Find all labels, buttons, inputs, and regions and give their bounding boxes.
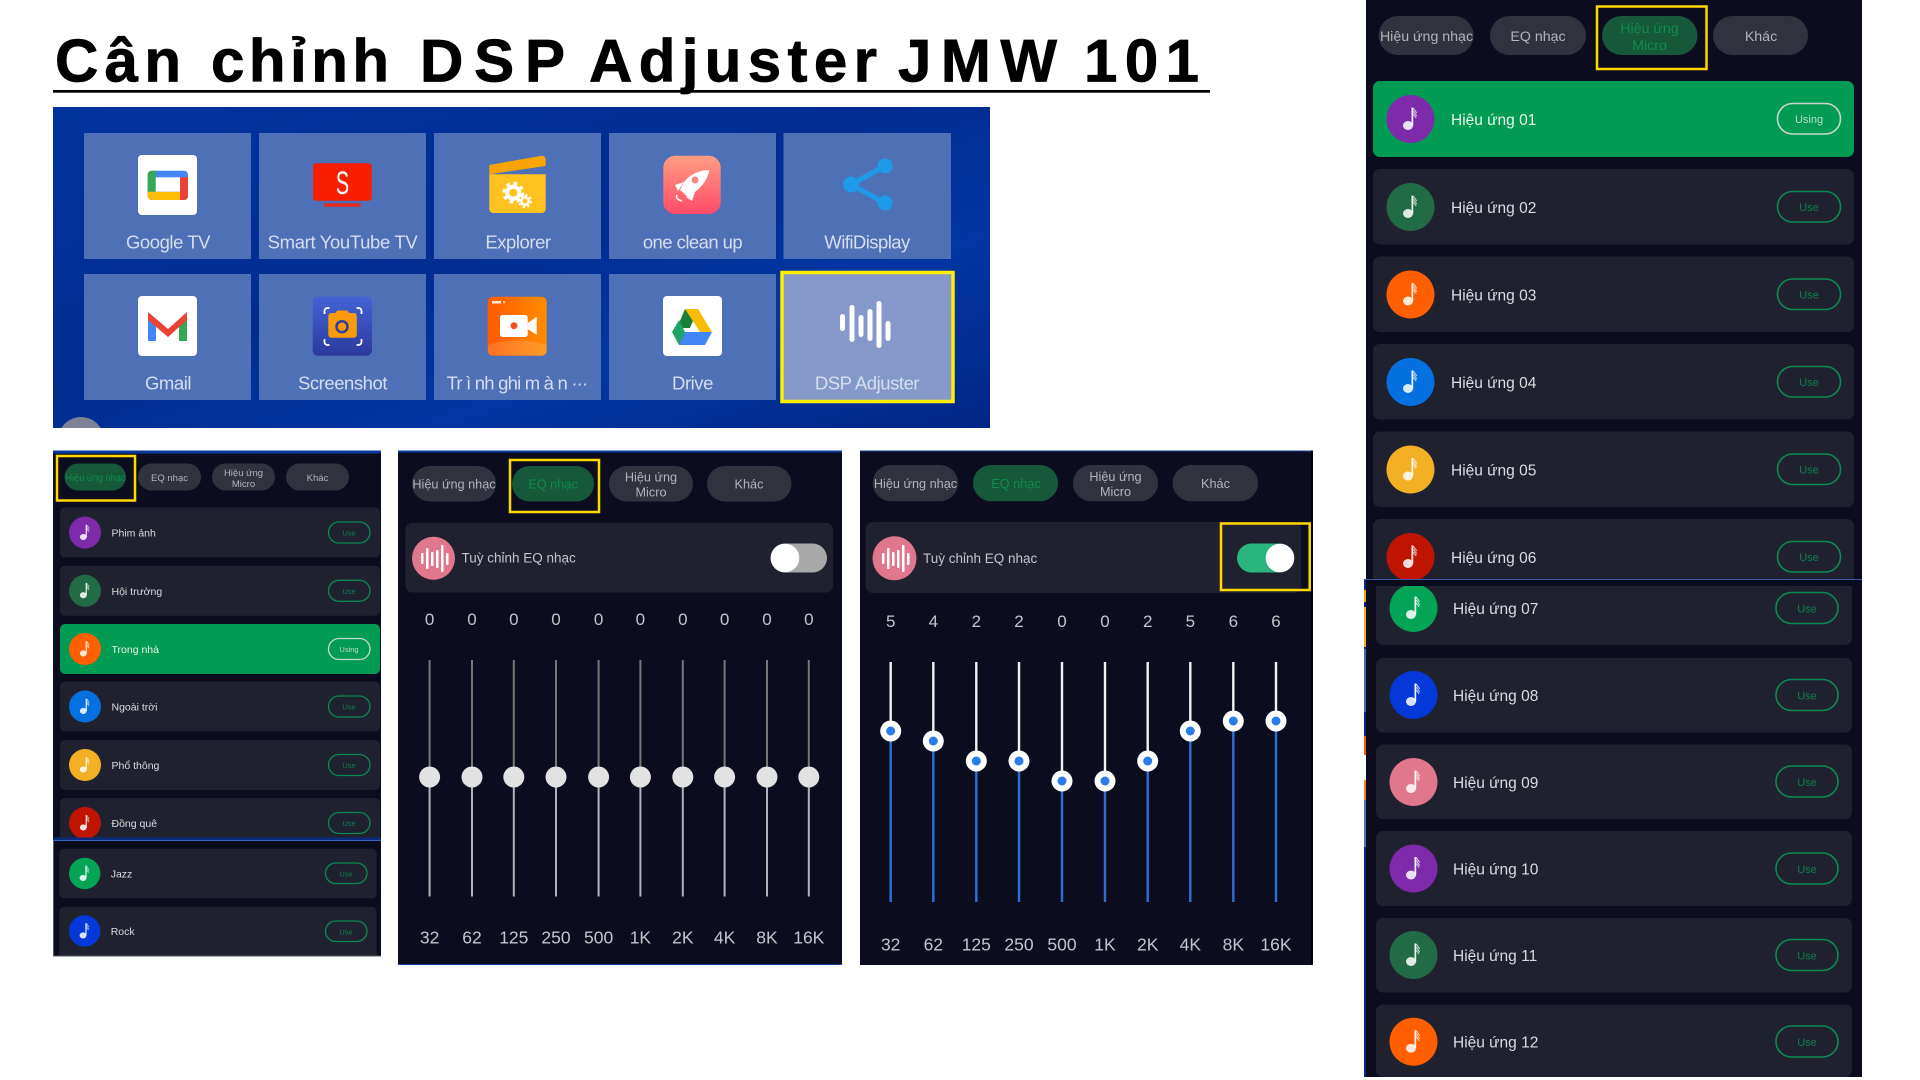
row: Hội trường	[60, 566, 380, 616]
tile: DSP Adjuster highlighted	[782, 273, 952, 401]
tabs: Khác	[735, 478, 764, 492]
tile: screen recorder: Tr ì nh ghi m à n ···	[447, 372, 587, 394]
row: Hiệu ứng 03: Hiệu ứng 03	[1451, 288, 1536, 304]
row: Jazz: Use	[339, 870, 353, 878]
EQ band values: 0	[1057, 612, 1067, 631]
EQ frequency labels: 250	[1004, 934, 1034, 954]
row: Hiệu ứng 01 active: Hiệu ứng 01	[1451, 112, 1536, 129]
row: Rock	[59, 907, 377, 956]
EQ band values: 4	[929, 612, 938, 631]
panel: EQ on	[860, 450, 1313, 965]
EQ sliders	[880, 662, 1286, 902]
EQ band values: 2	[1014, 612, 1024, 631]
EQ band values	[425, 610, 814, 629]
EQ frequency labels: 32	[420, 928, 439, 948]
tile: Gmail: Gmail	[145, 372, 191, 394]
tile: Drive	[609, 274, 776, 400]
tabs	[64, 464, 349, 490]
row: Hiệu ứng 09: Use	[1797, 777, 1817, 789]
row: Hiệu ứng 09	[1376, 744, 1852, 819]
EQ frequency labels: 62	[462, 928, 482, 948]
EQ band values: 0	[1100, 612, 1110, 631]
highlight box: DSP Adjuster	[782, 272, 953, 402]
lower section of micro list	[1364, 579, 1862, 1077]
row: Hiệu ứng 02	[1373, 169, 1854, 244]
tile: Google TV: Google TV	[126, 232, 211, 252]
card: custom EQ toggle off	[406, 523, 833, 592]
EQ band values: 0	[678, 610, 688, 629]
row: Hiệu ứng 02: Use	[1799, 202, 1819, 214]
tabs: Micro	[232, 479, 255, 490]
title: JMW	[898, 28, 1057, 95]
tile: Screenshot: Screenshot	[298, 372, 387, 394]
row: Hiệu ứng 05	[1373, 432, 1854, 507]
row: Hiệu ứng 10: Hiệu ứng 10	[1453, 862, 1539, 878]
EQ band values: 0	[425, 610, 434, 629]
tile: WifiDisplay: WifiDisplay	[824, 232, 911, 252]
tabs: Hiệu ứng	[625, 470, 677, 484]
tabs: Hiệu ứng	[1620, 21, 1679, 37]
row: Hiệu ứng 06	[1373, 519, 1854, 594]
tabs: Micro	[635, 486, 667, 500]
tabs: Khác	[307, 473, 329, 484]
tile: WifiDisplay	[784, 133, 951, 259]
EQ frequency labels: 1K	[630, 928, 651, 948]
row: Hiệu ứng 02: Hiệu ứng 02	[1451, 200, 1536, 217]
panel: micro effects list	[1364, 0, 1862, 1077]
tabs: Hiệu ứng nhạc	[66, 473, 126, 484]
tile: Screenshot	[259, 274, 426, 400]
row: Hiệu ứng 08: Hiệu ứng 08	[1453, 688, 1538, 705]
EQ band values: 0	[636, 610, 645, 629]
tabs: Micro	[1100, 485, 1131, 499]
tabs: Hiệu ứng nhạc	[874, 477, 958, 491]
row: Trong nhà active: Trong nhà	[112, 644, 159, 656]
card: custom EQ toggle on: Tuỳ chỉnh EQ nhạc	[923, 551, 1038, 566]
EQ band values: 6	[1229, 612, 1238, 631]
title: Cân	[55, 28, 181, 95]
row: Hiệu ứng 08: Use	[1797, 690, 1817, 702]
title: 101	[1084, 28, 1199, 95]
EQ frequency labels: 2K	[672, 928, 694, 948]
row: Phim ảnh	[60, 508, 380, 558]
EQ band values: 0	[804, 610, 814, 629]
EQ frequency labels: 16K	[793, 928, 825, 948]
EQ band values: 6	[1271, 612, 1281, 631]
row: Jazz: Jazz	[111, 868, 132, 880]
row: Trong nhà active: Using	[339, 645, 359, 654]
tabs: Hiệu ứng	[224, 468, 263, 479]
title: Adjuster	[589, 28, 877, 95]
row: Hiệu ứng 07: Hiệu ứng 07	[1453, 601, 1538, 618]
EQ frequency labels: 8K	[1223, 934, 1244, 954]
tabs: Hiệu ứng nhạc	[412, 478, 496, 492]
EQ band values	[886, 612, 1281, 631]
EQ band values: 5	[886, 612, 895, 631]
EQ sliders	[419, 660, 819, 896]
EQ frequency labels: 62	[924, 934, 943, 954]
tabs: Hiệu ứng nhạc	[1380, 29, 1473, 45]
tabs: Khác	[1745, 29, 1777, 45]
tile: Drive: Drive	[672, 372, 713, 394]
row: Đồng quê: Use	[342, 819, 356, 828]
EQ band values: 5	[1186, 612, 1195, 631]
row: Hiệu ứng 07: Use	[1797, 604, 1817, 616]
row: Đồng quê: Đồng quê	[112, 818, 157, 830]
row: Hiệu ứng 05: Use	[1799, 464, 1819, 476]
highlight box: music tab	[57, 456, 135, 500]
row: Ngoài trời: Ngoài trời	[112, 702, 157, 714]
EQ frequency labels: 500	[584, 928, 613, 948]
card: custom EQ toggle on	[866, 522, 1301, 593]
row: Hiệu ứng 04: Hiệu ứng 04	[1451, 375, 1537, 392]
row: Ngoài trời	[60, 682, 380, 732]
EQ frequency labels: 500	[1047, 934, 1077, 954]
row: Hiệu ứng 01 active: Using	[1795, 114, 1823, 126]
row: Phổ thông: Use	[342, 761, 356, 770]
row: Hiệu ứng 03	[1373, 256, 1854, 332]
row: Trong nhà active	[60, 624, 380, 674]
EQ frequency labels	[881, 934, 1292, 954]
EQ band values: 2	[1143, 612, 1152, 631]
panel: TV app launcher	[53, 107, 990, 463]
row: Hội trường: Hội trường	[112, 586, 162, 598]
tabs	[873, 465, 1258, 501]
row: Hiệu ứng 09: Hiệu ứng 09	[1453, 775, 1538, 792]
title: chỉnh	[211, 28, 389, 95]
EQ frequency labels: 1K	[1094, 934, 1116, 954]
card: custom EQ toggle off: Tuỳ chỉnh EQ nhạc	[462, 550, 576, 566]
row: Hiệu ứng 11	[1376, 918, 1852, 992]
tile: screen recorder	[434, 274, 601, 400]
row: Phổ thông	[60, 740, 380, 790]
row: Hiệu ứng 12: Use	[1797, 1037, 1817, 1049]
row: Phổ thông: Phổ thông	[112, 760, 160, 772]
tabs: Khác	[1201, 477, 1231, 491]
tabs: Hiệu ứng	[1089, 470, 1142, 484]
title	[53, 28, 1210, 95]
tile: DSP Adjuster highlighted: DSP Adjuster	[815, 372, 919, 394]
tabs: Micro	[1632, 38, 1667, 54]
tabs: EQ nhạc	[991, 477, 1041, 491]
row: Phim ảnh: Phim ảnh	[112, 528, 156, 540]
row: Jazz	[59, 849, 377, 898]
EQ frequency labels: 125	[962, 934, 991, 954]
EQ band values: 0	[762, 610, 772, 629]
EQ frequency labels: 125	[499, 928, 528, 948]
EQ frequency labels: 250	[541, 928, 571, 948]
row: Hiệu ứng 12	[1376, 1004, 1852, 1077]
panel: music effects list	[53, 450, 381, 956]
tabs	[412, 466, 792, 502]
tabs	[1379, 16, 1808, 55]
EQ band values: 0	[594, 610, 603, 629]
title: DSP	[420, 28, 565, 95]
row: Hiệu ứng 11: Use	[1797, 950, 1817, 962]
EQ frequency labels	[420, 928, 825, 948]
panel: EQ off	[398, 450, 842, 965]
row: Hội trường: Use	[342, 587, 356, 596]
EQ frequency labels: 32	[881, 934, 900, 954]
row: Hiệu ứng 04	[1373, 344, 1854, 420]
tile: Smart YouTube TV	[259, 133, 426, 259]
row: Hiệu ứng 10	[1376, 831, 1852, 906]
EQ frequency labels: 16K	[1260, 934, 1292, 954]
EQ band values: 2	[972, 612, 981, 631]
row: Hiệu ứng 03: Use	[1799, 290, 1819, 302]
row: Rock: Rock	[111, 926, 135, 938]
tile: Explorer: Explorer	[485, 232, 551, 252]
EQ frequency labels: 8K	[756, 928, 778, 948]
highlight box: micro tab	[1597, 6, 1706, 69]
lower section of list	[53, 838, 381, 956]
row: Hiệu ứng 06: Hiệu ứng 06	[1451, 550, 1536, 567]
row: Hiệu ứng 01 active	[1373, 81, 1854, 157]
EQ band values: 0	[467, 610, 477, 629]
highlight box: toggle	[1221, 524, 1310, 590]
row: Hiệu ứng 04: Use	[1799, 377, 1819, 389]
EQ frequency labels: 2K	[1137, 934, 1159, 954]
EQ band values: 0	[509, 610, 519, 629]
tabs: EQ nhạc	[151, 473, 188, 484]
row: Rock: Use	[339, 928, 353, 936]
row: Hiệu ứng 07	[1366, 580, 1862, 645]
row: Hiệu ứng 11: Hiệu ứng 11	[1453, 948, 1537, 965]
row: Ngoài trời: Use	[342, 702, 356, 712]
row: Phim ảnh: Use	[342, 528, 356, 538]
row: Hiệu ứng 05: Hiệu ứng 05	[1451, 462, 1536, 480]
highlight box: EQ tab	[510, 460, 599, 512]
row: Đồng quê	[60, 798, 380, 848]
tile: Gmail	[84, 274, 251, 400]
EQ frequency labels: 4K	[1180, 934, 1201, 954]
tabs: EQ nhạc	[528, 478, 578, 492]
tile: one clean up	[609, 133, 776, 259]
EQ frequency labels: 4K	[714, 928, 736, 948]
EQ band values: 0	[551, 610, 561, 629]
row: Hiệu ứng 12: Hiệu ứng 12	[1453, 1035, 1538, 1052]
tile: one clean up: one clean up	[643, 232, 742, 252]
EQ band values: 0	[720, 610, 729, 629]
tile: Explorer	[434, 133, 601, 259]
row: Hiệu ứng 10: Use	[1797, 864, 1817, 876]
row: Hiệu ứng 08	[1376, 658, 1852, 732]
tile: Smart YouTube TV: S	[336, 165, 349, 201]
tile: Smart YouTube TV: Smart YouTube TV	[268, 232, 418, 252]
row: Hiệu ứng 06: Use	[1799, 552, 1819, 564]
tabs: EQ nhạc	[1510, 29, 1566, 45]
tile: Google TV	[84, 133, 251, 259]
